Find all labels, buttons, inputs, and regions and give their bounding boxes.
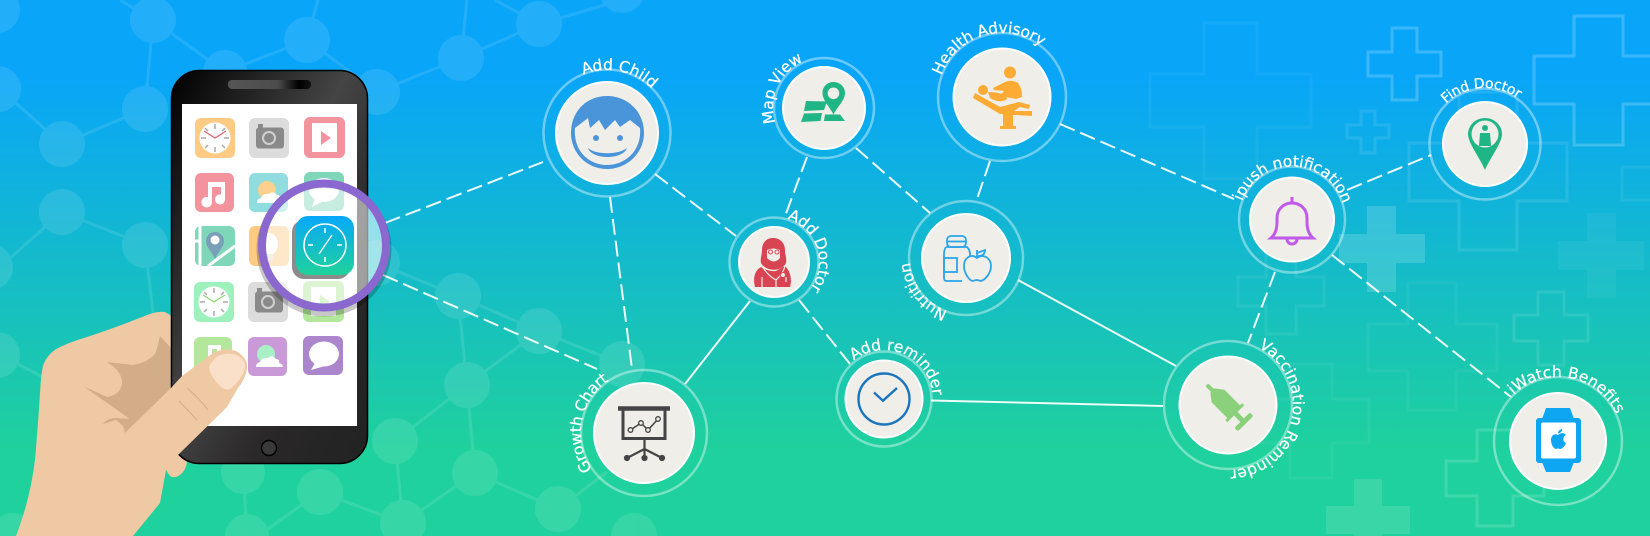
node: iWatch Benefits xyxy=(1492,365,1624,506)
label: Health Advisory: Health Advisory xyxy=(932,21,1046,74)
icon: syringe xyxy=(1198,376,1254,432)
magnifier lens over screen xyxy=(260,184,388,313)
phone xyxy=(172,70,368,464)
app: music green xyxy=(194,337,232,377)
app: clock green xyxy=(194,282,234,322)
app: weather teal xyxy=(249,173,288,212)
label: Vaccination Reminder: Vaccination Reminder xyxy=(1230,338,1305,479)
label: Map View: Map View xyxy=(762,54,801,124)
label: Add Doctor: Add Doctor xyxy=(787,210,829,294)
icon: doctor location pin xyxy=(1468,118,1502,170)
icon: child face xyxy=(571,96,644,169)
node: Add Doctor xyxy=(728,210,829,308)
label: Find Doctor: Find Doctor xyxy=(1440,78,1522,103)
app: weather purple xyxy=(248,337,287,376)
icon: map and pin xyxy=(801,82,845,122)
app: chat green xyxy=(304,172,344,211)
app: music pink xyxy=(195,173,234,212)
node: Growth Chart xyxy=(570,368,708,498)
app: video pink xyxy=(304,117,345,158)
connector lines between features xyxy=(383,124,1511,406)
icon: smart watch xyxy=(1536,408,1581,472)
phone body xyxy=(172,70,368,464)
icon: supplement bottle and apple xyxy=(944,236,991,281)
icon: clock with check xyxy=(858,374,910,424)
node: Find Doctor xyxy=(1428,78,1542,201)
app: video green xyxy=(303,281,344,322)
thumb nail xyxy=(209,354,245,389)
speaker xyxy=(228,80,311,89)
label: Nutrition: Nutrition xyxy=(902,264,946,321)
thumb over phone xyxy=(125,349,247,470)
node: Health Advisory xyxy=(932,21,1068,162)
label: ipush notification: ipush notification xyxy=(1232,155,1350,203)
label: Growth Chart: Growth Chart xyxy=(570,374,609,472)
icon: presentation board xyxy=(618,408,670,460)
app: camera grey 2 xyxy=(248,282,288,322)
background network of circles xyxy=(0,0,657,536)
app: camera grey xyxy=(249,118,289,158)
node: push notification xyxy=(1232,155,1350,274)
app: video green placeholder xyxy=(303,226,344,266)
icon: doctor treating patient xyxy=(973,66,1032,129)
app: map green xyxy=(195,226,235,266)
screen xyxy=(182,104,357,426)
label: Add Child: Add Child xyxy=(583,58,659,88)
node: Nutrition xyxy=(902,200,1024,321)
hand palm behind phone xyxy=(16,312,187,536)
node: Add reminder xyxy=(835,338,942,448)
icon: female doctor xyxy=(754,238,791,287)
node: Add Child xyxy=(542,58,672,198)
node: Map View xyxy=(762,54,876,160)
label: Add reminder: Add reminder xyxy=(851,338,942,395)
app icon grid xyxy=(194,117,345,377)
node: Vaccination Reminder xyxy=(1162,338,1305,479)
app: bulb orange xyxy=(249,226,289,266)
app: clock orange xyxy=(195,118,235,158)
icon: bell xyxy=(1271,197,1313,244)
highlighted app icon xyxy=(292,216,354,279)
app: chat purple xyxy=(303,336,343,375)
label: iWatch Benefits: iWatch Benefits xyxy=(1506,365,1624,413)
home button xyxy=(262,440,276,456)
background medical crosses xyxy=(1150,16,1650,526)
